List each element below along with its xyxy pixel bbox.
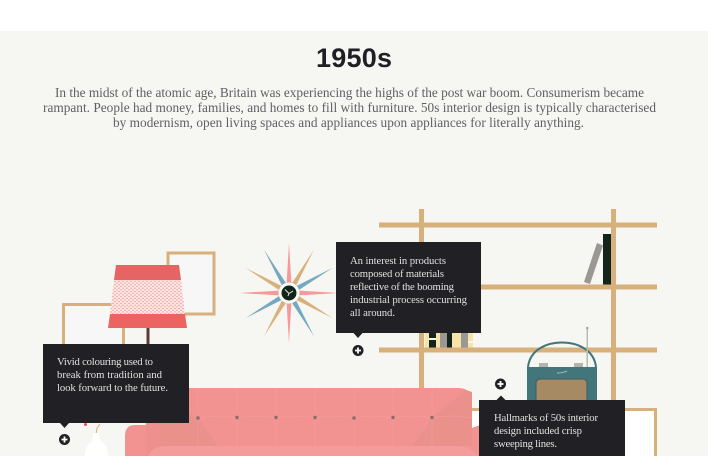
callout: sweeping lines xyxy=(479,396,625,456)
callout: colouring: look forward to the future. xyxy=(57,382,168,394)
books on upper shelf xyxy=(584,234,611,284)
left arm xyxy=(125,425,158,456)
callout: colouring xyxy=(43,344,189,428)
title: 1950s xyxy=(316,43,392,73)
intro text: by modernism, open living spaces and appliances upon appliances for literally anything. xyxy=(113,115,584,130)
icon: plus marker right xyxy=(495,378,506,390)
seat cushion xyxy=(148,446,478,456)
books on lower shelf xyxy=(425,330,473,348)
callout: sweeping lines: design included crisp xyxy=(494,425,582,437)
sofa back xyxy=(146,388,472,456)
vase with stems xyxy=(84,423,108,456)
lamp xyxy=(108,265,187,346)
sunburst clock xyxy=(239,243,339,343)
sofa back side shading xyxy=(146,390,472,446)
callout: materials: industrial process occurring xyxy=(350,294,468,306)
picture frame right xyxy=(168,253,214,314)
callout: materials xyxy=(336,242,481,338)
callout: materials: composed of materials xyxy=(350,268,444,280)
tufting lines xyxy=(198,388,471,446)
callout: materials: all around. xyxy=(350,307,395,319)
callout: sweeping lines: sweeping lines. xyxy=(494,438,557,450)
callout: materials: An interest in products xyxy=(350,255,446,267)
sofa buttons xyxy=(196,416,434,420)
picture frame left xyxy=(64,304,124,364)
callout: colouring: break from tradition and xyxy=(57,369,163,381)
intro text xyxy=(43,85,656,130)
picture frame bottom right xyxy=(466,410,656,456)
callout: sweeping lines: Hallmarks of 50s interior xyxy=(494,412,598,424)
sofa xyxy=(125,388,480,456)
intro text: rampant. People had money, families, and homes to fill with furniture. 50s interior design is typically characterised xyxy=(43,100,656,115)
right arm xyxy=(472,425,480,456)
callout: materials: reflective of the booming xyxy=(350,281,455,293)
intro text: In the midst of the atomic age, Britain was experiencing the highs of the post war boom. Consumerism became xyxy=(55,85,644,100)
icon: plus marker middle xyxy=(352,345,364,356)
radio xyxy=(527,327,597,409)
callout: colouring: Vivid colouring used to xyxy=(57,356,153,368)
shelving unit xyxy=(379,209,657,456)
icon: plus marker left xyxy=(59,434,70,445)
